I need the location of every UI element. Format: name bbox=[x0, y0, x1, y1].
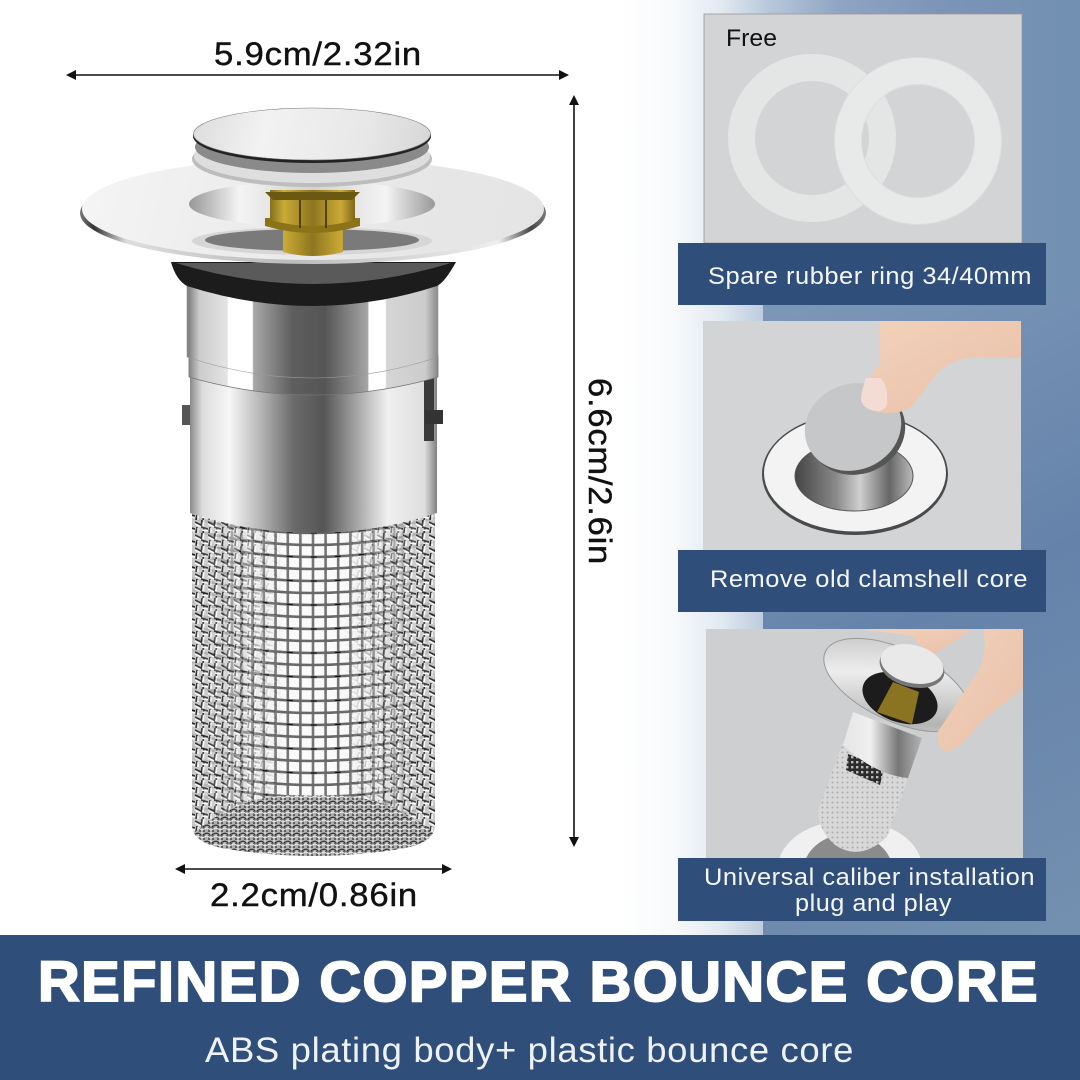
button cap bbox=[192, 108, 432, 187]
dimension: mesh width bbox=[175, 864, 452, 913]
dimension: height: 6.6cm/2.6in bbox=[582, 378, 618, 565]
heading: REFINED COPPER BOUNCE CORE bbox=[38, 950, 1039, 1014]
thumb and hand bbox=[861, 321, 1021, 413]
icon: right rubber ring bbox=[848, 71, 988, 211]
dimension: top width: 5.9cm/2.32in bbox=[214, 36, 422, 72]
caption bar bbox=[678, 858, 1046, 921]
panel: spare rubber ring bbox=[678, 14, 1046, 305]
mesh basket bbox=[818, 743, 911, 852]
flange bbox=[823, 638, 964, 732]
upper dish bbox=[189, 181, 435, 227]
body ring bbox=[189, 355, 438, 395]
side weave bbox=[192, 505, 435, 865]
caption bar: Spare rubber ring 34/40mm bbox=[708, 263, 1032, 290]
bottom banner bbox=[0, 935, 1080, 1080]
brass stem bbox=[877, 682, 919, 724]
dimension: top width bbox=[66, 36, 569, 80]
label: free: Free bbox=[726, 25, 777, 52]
button bbox=[880, 656, 944, 688]
mesh basket bbox=[192, 505, 435, 865]
icon: left rubber ring bbox=[742, 68, 882, 208]
panel: remove old clamshell core bbox=[678, 321, 1046, 612]
metal body bbox=[843, 712, 922, 778]
caption bar: plug and play bbox=[795, 890, 952, 917]
side clips bbox=[182, 378, 443, 441]
mesh bottom weave bbox=[194, 795, 433, 856]
caption bar bbox=[678, 243, 1046, 305]
lower body bbox=[190, 375, 437, 533]
thumb and hand bbox=[937, 629, 1023, 752]
caption bar bbox=[678, 550, 1046, 612]
lower opening bbox=[192, 227, 432, 255]
core opening bbox=[862, 672, 938, 724]
drain opening bbox=[794, 452, 914, 512]
dimension: height bbox=[569, 95, 618, 847]
fingers behind bbox=[861, 629, 973, 654]
sink drain ring bbox=[762, 413, 948, 535]
flange bbox=[80, 158, 546, 264]
dimension: mesh width: 2.2cm/0.86in bbox=[210, 877, 418, 913]
caption bar: Remove old clamshell core bbox=[710, 566, 1028, 593]
clamshell cap bbox=[819, 411, 906, 475]
caption bar: Universal caliber installation bbox=[704, 864, 1035, 891]
basket dark window bbox=[846, 754, 884, 785]
thumbnail bbox=[861, 378, 887, 411]
black gasket bbox=[171, 262, 456, 306]
subheading: ABS plating body+ plastic bounce core bbox=[205, 1031, 854, 1070]
sink drain bbox=[780, 824, 920, 858]
upper body bbox=[187, 285, 438, 378]
panel: universal caliber installation bbox=[678, 619, 1046, 921]
brass core bbox=[265, 190, 360, 256]
product: drain stopper bbox=[80, 108, 546, 865]
